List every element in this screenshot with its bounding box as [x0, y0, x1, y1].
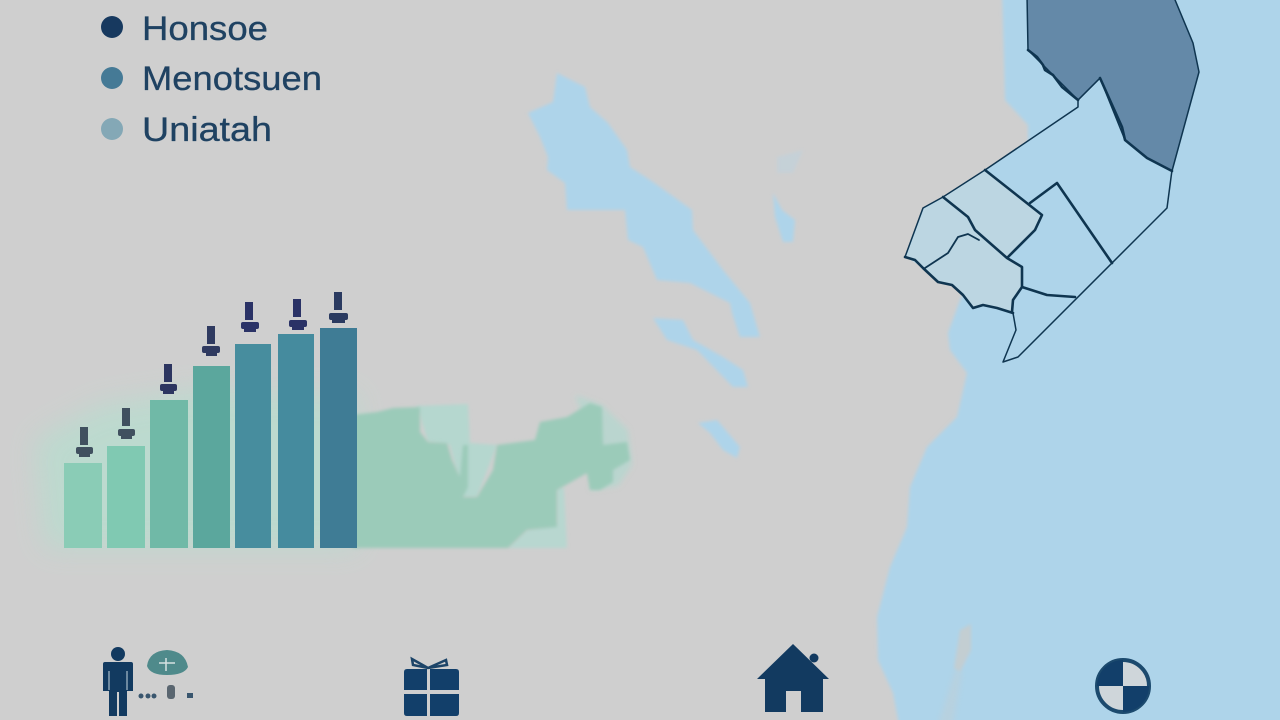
map: light provinces	[905, 78, 1172, 362]
map: heavy borders	[905, 50, 1172, 313]
lake: faint top	[777, 150, 803, 173]
legend item 3	[101, 111, 272, 149]
icon: gift box	[404, 659, 459, 716]
icon: person with cloud	[103, 647, 193, 716]
bars	[64, 328, 357, 548]
lake: lower	[698, 420, 740, 458]
map: thin inner border	[925, 234, 979, 268]
green halo	[35, 390, 357, 548]
person	[103, 647, 133, 716]
icon: house	[757, 644, 829, 712]
cloud	[147, 650, 188, 675]
green main shape	[352, 403, 630, 548]
small dots	[138, 685, 193, 699]
inland lakes	[528, 73, 803, 458]
lake: right	[773, 193, 795, 242]
green faded edge, right	[575, 395, 632, 490]
green faded edge, bottom	[508, 488, 567, 548]
legend item 3: Uniatah	[142, 111, 272, 149]
map: grey-toned west provinces	[906, 171, 1041, 312]
legend item 1: Honsoe	[142, 10, 268, 48]
map: dark province	[1027, 0, 1199, 171]
legend item 2: Menotsuen	[142, 60, 322, 98]
green faded edge, middle notch	[417, 404, 497, 497]
icon: quartered circle	[1097, 660, 1149, 712]
legend	[101, 10, 322, 149]
bar chart	[64, 292, 357, 548]
sea and coastline	[877, 0, 1280, 720]
green land region	[35, 390, 632, 548]
lake: main	[528, 73, 760, 337]
bar markers	[76, 292, 348, 457]
lake: middle	[653, 318, 748, 387]
region map	[905, 0, 1199, 362]
